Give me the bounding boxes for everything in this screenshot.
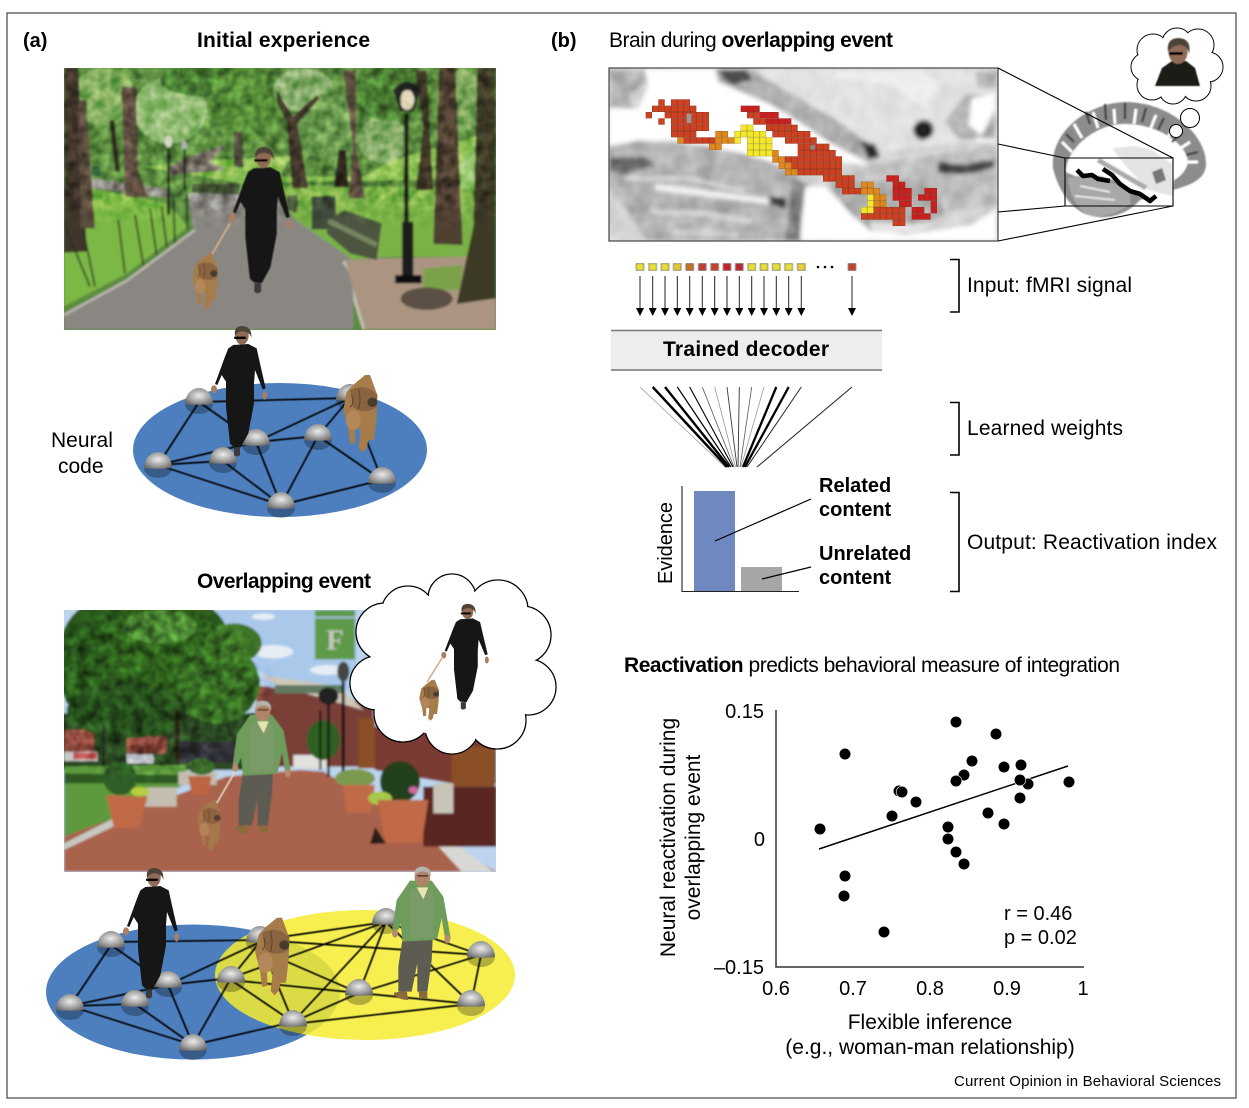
label: neural code: code (58, 455, 104, 478)
trend line (819, 766, 1068, 849)
label: related content: Related (819, 475, 891, 497)
trained decoder box: Trained decoder (663, 338, 829, 361)
output bar chart: evidence (655, 475, 911, 592)
label: neural code: Neural (51, 429, 113, 452)
yellow ellipse (215, 910, 515, 1040)
thought cloud: remembered woman and dog (350, 574, 556, 754)
x axis ticks: 0.9 (993, 978, 1021, 1000)
input: fMRI voxel signal squares with arrows (636, 264, 856, 316)
label: unrelated content: content (819, 567, 892, 589)
y axis ticks: –0.15 (714, 957, 764, 979)
man figure (392, 867, 451, 1000)
heading: brain during overlapping event: Brain during overlapping event (609, 29, 893, 52)
heading: overlapping event: Overlapping event (197, 570, 371, 593)
woman figure (123, 868, 179, 998)
bar: related content (694, 491, 735, 591)
dog in cloud (419, 680, 439, 721)
bracket and label: output reactivation index (950, 492, 1218, 592)
brain MRI zoom with heat map (605, 65, 1005, 245)
diagram: neural code network with woman and dog (133, 326, 427, 518)
heading: reactivation predicts behavioral measure: Reactivation predicts behavioral measure of integration (624, 654, 1120, 677)
dog figure (255, 918, 289, 995)
zoom connector lines (998, 68, 1173, 241)
heading: initial experience: Initial experience (197, 29, 370, 52)
photo: man walking dog on brick street (57, 593, 500, 877)
bracket and label: learned weights (950, 402, 1123, 455)
thought bubbles (1180, 108, 1200, 128)
x axis ticks: 1 (1077, 978, 1089, 1000)
x axis ticks (762, 978, 1089, 1000)
data points (814, 716, 1075, 938)
black activation trace (1077, 169, 1156, 201)
blue ellipse (133, 383, 427, 517)
y axis ticks (714, 701, 765, 979)
scatter plot: reactivation vs flexible inference (657, 701, 1089, 1059)
woman portrait (1155, 38, 1200, 86)
label: related content: content (819, 499, 892, 521)
photo: woman walking dog in park (60, 60, 500, 333)
panel: (a) initial experience and overlapping event (23, 29, 556, 1060)
panel: (b) brain decoding and behavioural prediction (551, 28, 1223, 1059)
y axis title: Neural reactivation during (657, 718, 680, 957)
label: unrelated content: Unrelated (819, 543, 911, 565)
diagram: overlapping neural network with woman, dog and man (46, 867, 515, 1060)
y axis ticks: 0 (754, 829, 765, 851)
y axis ticks: 0.15 (725, 701, 764, 723)
statistics: r = 0.46 (1004, 903, 1072, 925)
voxel heat map (646, 99, 937, 226)
panel label (a): (a) (23, 30, 47, 52)
x axis title: Flexible inference (848, 1011, 1012, 1034)
x axis ticks: 0.8 (916, 978, 944, 1000)
photo: man walking dog on brick street: F (326, 624, 344, 656)
whole brain slice (1053, 102, 1206, 217)
bracket and label: learned weights: Learned weights (967, 417, 1123, 440)
x axis title: (e.g., woman-man relationship) (785, 1036, 1075, 1059)
bracket and label: input fMRI signal (950, 260, 1132, 312)
bar: unrelated content (741, 567, 782, 591)
learned weights lines (640, 387, 852, 467)
credit line: Current Opinion in Behavioral Sciences (954, 1073, 1221, 1090)
woman in cloud (441, 604, 489, 710)
x axis ticks: 0.6 (762, 978, 790, 1000)
thought cloud (1131, 28, 1223, 104)
bracket and label: input fMRI signal: Input: fMRI signal (967, 274, 1132, 297)
trained decoder box (611, 330, 882, 370)
x axis ticks: 0.7 (839, 978, 867, 1000)
scatter plot: reactivation vs flexible inference: overlapping event (682, 754, 705, 920)
blue ellipse (46, 924, 340, 1060)
statistics: p = 0.02 (1004, 927, 1077, 949)
panel label (b): (b) (551, 30, 577, 52)
woman figure (211, 326, 267, 456)
bracket and label: output reactivation index: Output: Reactivation index (967, 531, 1218, 554)
dog figure (343, 375, 377, 453)
axis title: evidence: Evidence (655, 502, 677, 584)
whole brain inset with thought bubble (998, 28, 1223, 241)
